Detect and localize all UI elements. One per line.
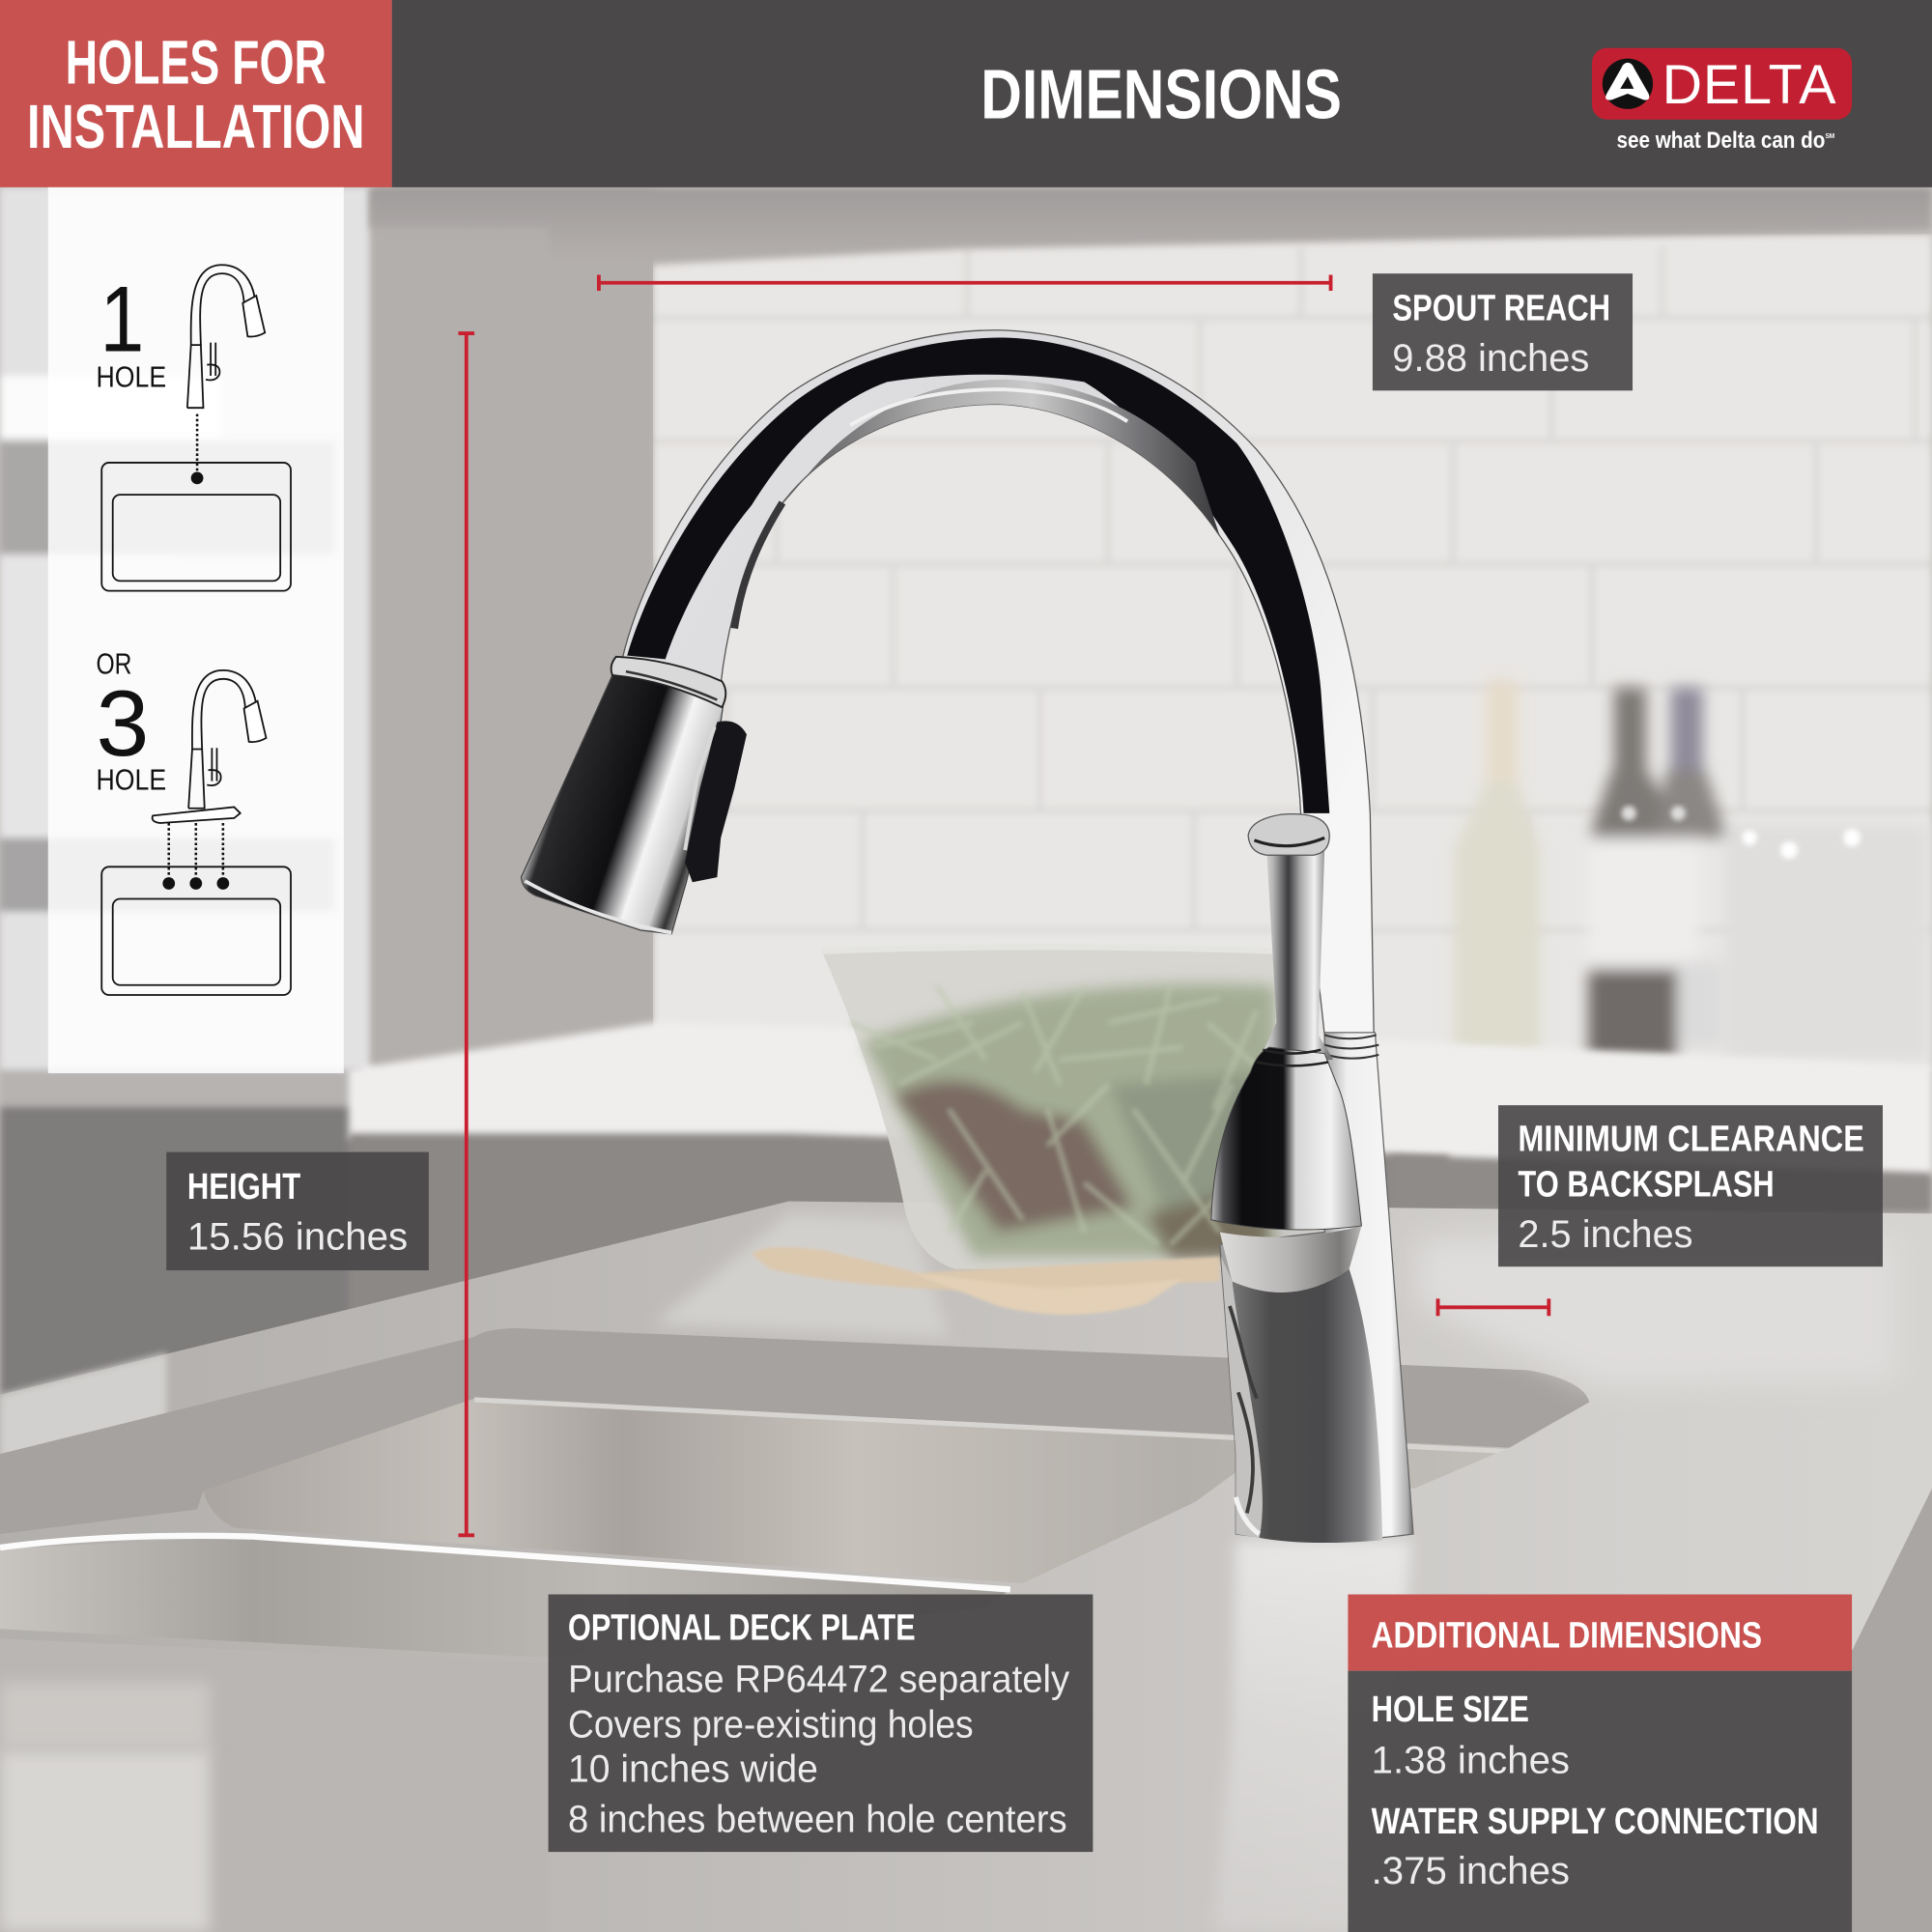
bottles and glasses [1454, 680, 1928, 1060]
Delta logo: see what Delta can do [1616, 128, 1861, 154]
panel: additional dimensions: WATER SUPPLY CONNECTION [1372, 1801, 1819, 1842]
callout: minimum clearance: TO BACKSPLASH [1518, 1164, 1775, 1206]
callout: minimum clearance: 2.5 inches [1518, 1213, 1693, 1256]
one hole label [96, 267, 166, 394]
Delta logo: DELTA [1662, 54, 1836, 116]
countertop [0, 1202, 1932, 1932]
callout: optional deck plate: 10 inches wide [568, 1747, 818, 1790]
handle stem [1260, 850, 1333, 1060]
lower body reflection [1233, 1269, 1382, 1543]
lower body pillar [1220, 1033, 1413, 1540]
spray head [522, 657, 747, 934]
callout: optional deck plate: 8 inches between hole centers [568, 1799, 1067, 1841]
panel: additional dimensions: 1.38 inches [1372, 1739, 1570, 1781]
glass highlights [1622, 806, 1861, 859]
panel: hole options [48, 187, 344, 1073]
sink rim highlight [0, 1536, 1010, 1589]
upper cabinet underside [370, 187, 1932, 265]
sink basin metal [203, 1399, 1509, 1583]
callout: optional deck plate: Covers pre-existing holes [568, 1703, 974, 1746]
handle knob [1248, 814, 1329, 855]
grey column [370, 187, 656, 1068]
callout: spout reach [1373, 273, 1633, 390]
bowl and salad [822, 947, 1275, 1269]
callout: optional deck plate: Purchase RP64472 separately [568, 1658, 1069, 1700]
icon: one hole faucet [187, 265, 265, 408]
panel: additional dimensions: HOLE SIZE [1372, 1689, 1529, 1730]
icon: three hole faucet with deck plate [153, 670, 267, 823]
title: DIMENSIONS [980, 55, 1342, 133]
one hole label: 1 [99, 267, 144, 372]
three hole label: 3 [96, 670, 149, 776]
callout: height [166, 1152, 429, 1270]
three hole label [96, 648, 166, 797]
holes for installation heading panel [0, 0, 392, 187]
panel: additional dimensions [1348, 1595, 1852, 1932]
icon: three hole sink [101, 823, 291, 995]
holes for installation heading panel: INSTALLATION [27, 92, 365, 161]
dark lower cabinets [349, 1133, 1449, 1324]
reflection of faucet on counter [1213, 1540, 1410, 1932]
gooseneck spout [622, 330, 1374, 1035]
back counter [349, 1023, 1932, 1177]
sink ledge [0, 1328, 1589, 1534]
one hole label: HOLE [96, 361, 166, 394]
height dimension line [458, 333, 474, 1535]
callout: optional deck plate: OPTIONAL DECK PLATE [568, 1607, 916, 1649]
callout: minimum clearance [1498, 1105, 1883, 1266]
icon: one hole sink [101, 414, 291, 591]
callout: spout reach: 9.88 inches [1392, 337, 1589, 380]
holes for installation heading panel: HOLES FOR [66, 28, 327, 98]
callout: spout reach: SPOUT REACH [1392, 288, 1610, 329]
three hole label: OR [96, 648, 131, 681]
callout: optional deck plate [549, 1595, 1093, 1852]
handle body [1211, 1047, 1361, 1230]
faucet [522, 330, 1413, 1932]
tiled backsplash [653, 234, 1932, 1072]
collar ring [1324, 1035, 1378, 1059]
Delta logo [1592, 48, 1852, 154]
callout: height: 15.56 inches [187, 1215, 408, 1258]
Delta logo: SM [1825, 131, 1834, 140]
spout reach dimension line [599, 274, 1331, 291]
left wall with oven bands [0, 187, 376, 1403]
header bar [392, 0, 1932, 187]
panel: additional dimensions: .375 inches [1372, 1850, 1570, 1892]
minimum clearance dimension line [1438, 1298, 1548, 1316]
icon: delta emblem [1603, 59, 1653, 109]
counter gloss on right [1417, 1238, 1897, 1386]
wooden spoons [752, 1247, 1220, 1315]
callout: height: HEIGHT [187, 1166, 300, 1208]
near sink basin metal [0, 1537, 1010, 1658]
three hole label: HOLE [96, 764, 166, 797]
panel: additional dimensions: ADDITIONAL DIMENSIONS [1372, 1614, 1762, 1656]
callout: minimum clearance: MINIMUM CLEARANCE [1518, 1118, 1864, 1159]
near counter [542, 1306, 1932, 1932]
